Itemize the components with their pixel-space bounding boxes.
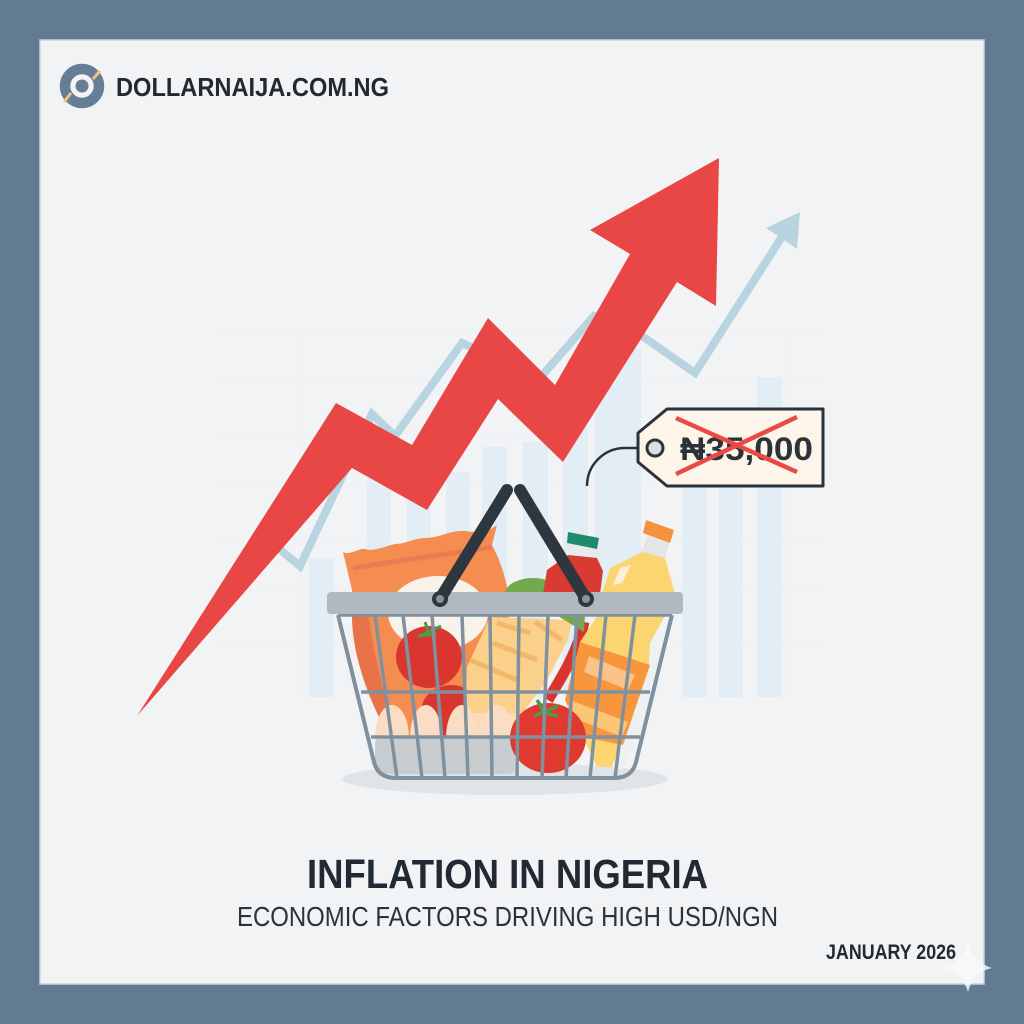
groceries xyxy=(343,520,675,774)
basket rim xyxy=(327,592,683,614)
basket shadow xyxy=(342,763,668,795)
icon: sparkle xyxy=(944,943,992,992)
old price: ₦35,000 xyxy=(680,431,813,467)
strike-through cross xyxy=(676,417,797,474)
tomato large xyxy=(510,700,586,773)
basket wires xyxy=(338,615,672,778)
title: INFLATION IN NIGERIA xyxy=(307,851,708,897)
green vegetable xyxy=(505,578,585,632)
subtitle: ECONOMIC FACTORS DRIVING HIGH USD/NGN xyxy=(237,901,778,932)
tag body xyxy=(638,409,823,486)
oil bottle xyxy=(565,520,675,770)
background bar chart xyxy=(309,348,782,697)
baguette xyxy=(465,617,572,738)
eggs xyxy=(375,705,514,771)
snack bag xyxy=(343,525,510,760)
red chili xyxy=(548,622,584,700)
icon: logo ring xyxy=(64,69,100,103)
wire basket xyxy=(327,490,683,778)
ketchup bottle xyxy=(543,532,603,594)
tomato medium xyxy=(396,622,462,688)
tag string xyxy=(587,448,647,486)
tomato small xyxy=(421,685,481,739)
handles xyxy=(432,490,594,607)
carton tray xyxy=(375,738,515,774)
logo xyxy=(64,69,389,103)
red rising arrow xyxy=(137,158,719,716)
price tag xyxy=(587,409,823,486)
light blue trend arrow xyxy=(278,212,800,566)
tag hole xyxy=(647,440,663,456)
date: JANUARY 2026 xyxy=(826,941,956,964)
brand name: DOLLARNAIJA.COM.NG xyxy=(116,72,389,102)
